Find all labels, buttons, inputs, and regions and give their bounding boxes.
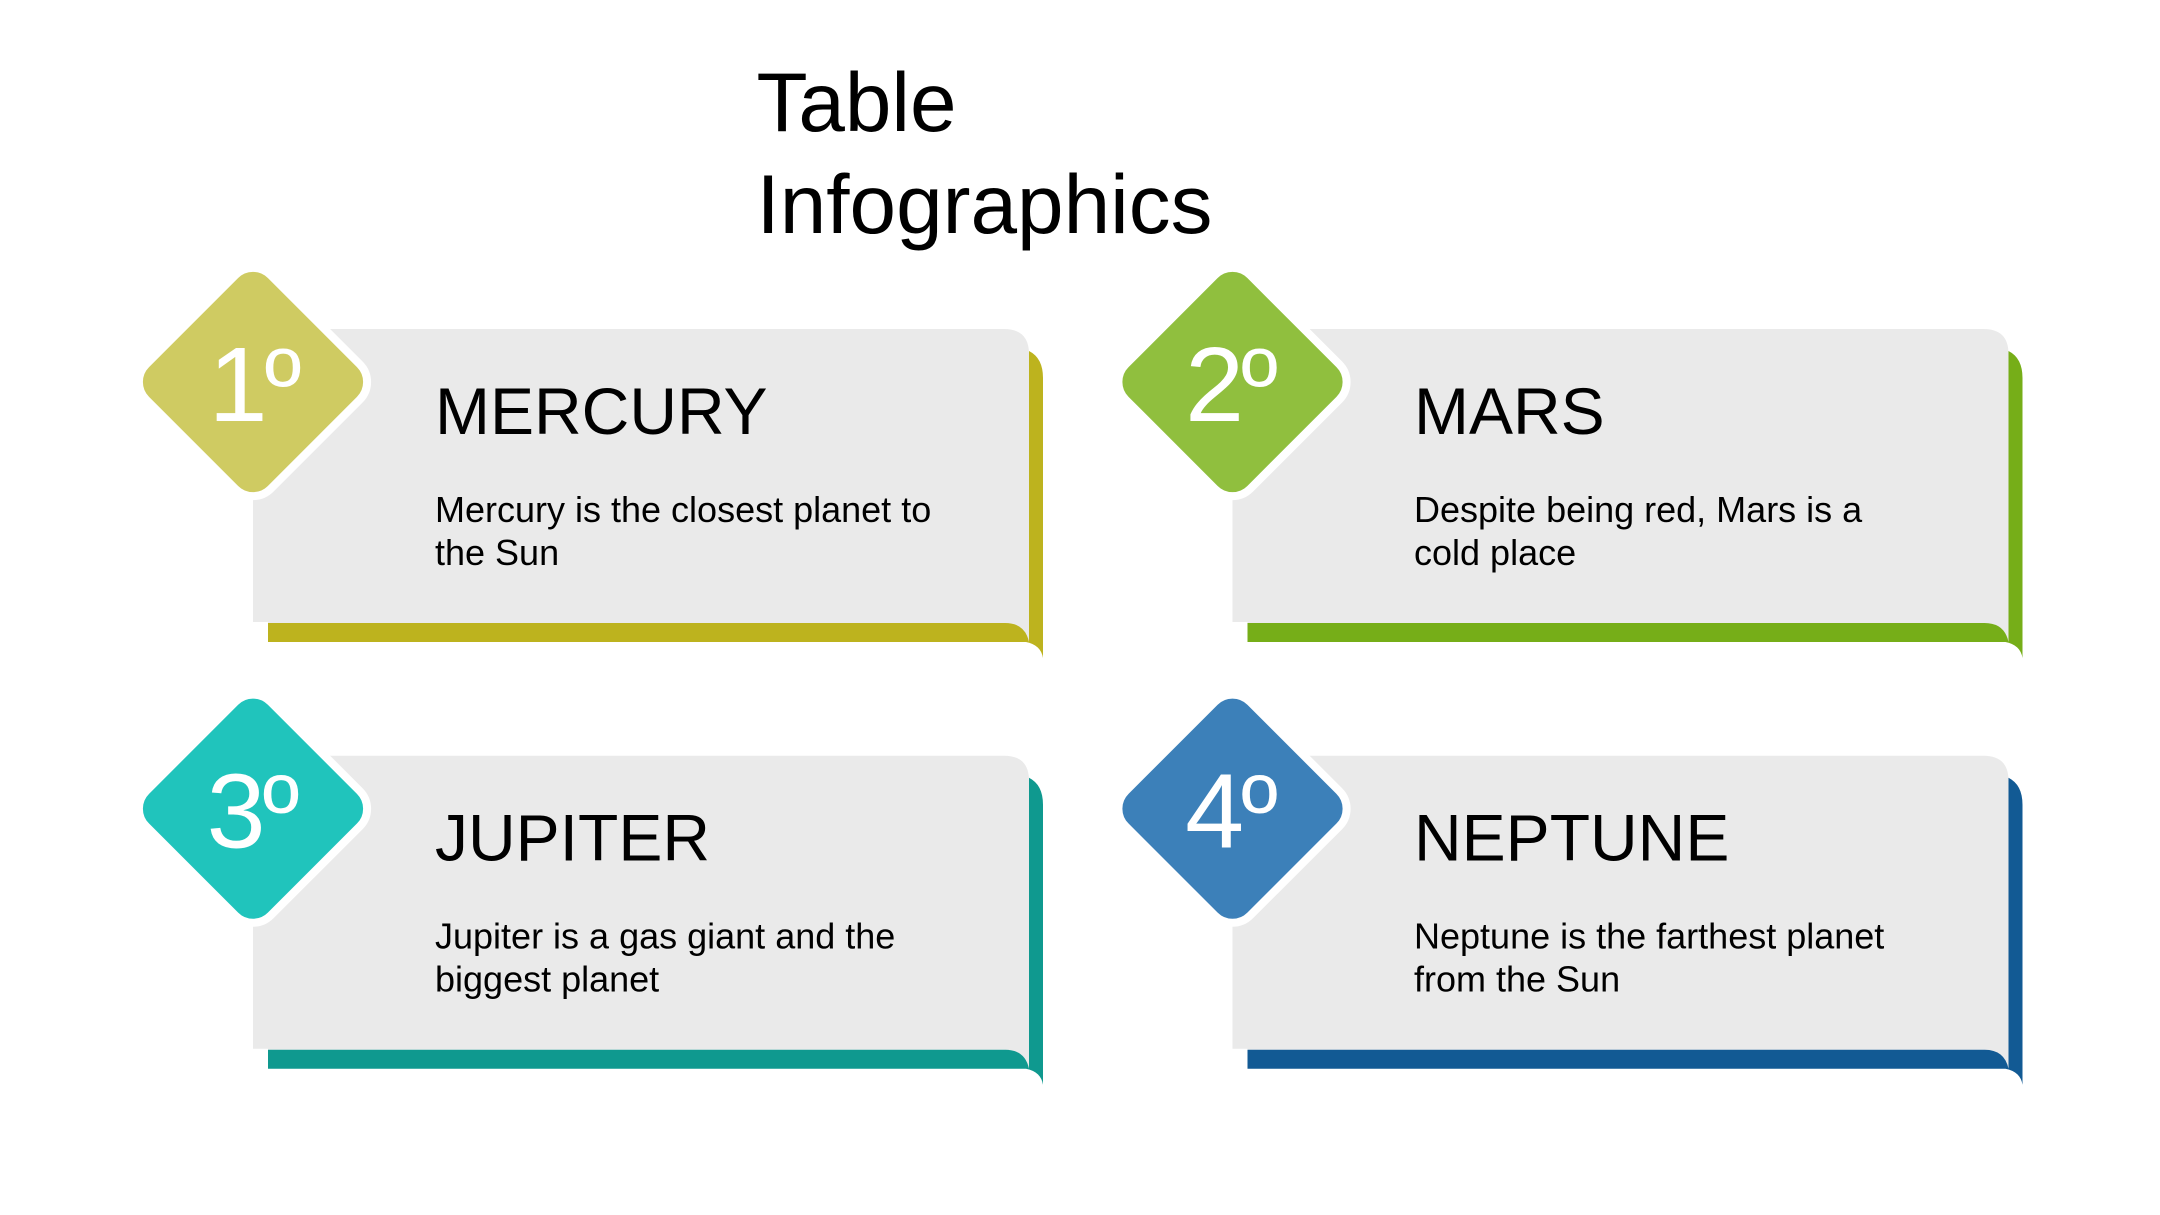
description: jupiter — [435, 916, 895, 1000]
card body: neptune — [1232, 756, 2008, 1069]
badge: 4: 4 — [1185, 753, 1244, 871]
badge: 1 — [129, 258, 377, 506]
card accent: jupiter — [268, 778, 1043, 1085]
description: neptune — [1414, 916, 1884, 1000]
badge: 3 — [129, 684, 377, 933]
badge: 3: º — [263, 756, 299, 868]
card body: jupiter — [253, 756, 1029, 1069]
description: mars — [1414, 489, 1863, 573]
description: mercury — [435, 489, 931, 573]
panel: mercury — [129, 258, 1043, 658]
description: mars: cold place — [1414, 532, 1576, 573]
heading: mercury: MERCURY — [435, 374, 767, 448]
badge: 4: º — [1241, 756, 1278, 868]
badge: 2 — [1108, 258, 1357, 506]
card accent: mars — [1248, 351, 2022, 658]
description: neptune: from the Sun — [1414, 959, 1620, 1000]
badge: 1: 1 — [209, 326, 268, 444]
title — [756, 55, 1212, 251]
description: jupiter: Jupiter is a gas giant and the — [435, 916, 895, 957]
badge: 2: º — [1241, 329, 1278, 441]
description: jupiter: biggest planet — [435, 959, 659, 1000]
heading: mars: MARS — [1414, 374, 1605, 448]
card accent: mercury — [268, 351, 1043, 658]
heading: jupiter: JUPITER — [435, 801, 710, 875]
badge: 2: 2 — [1185, 326, 1244, 444]
badge: 1: º — [265, 329, 301, 441]
card accent: neptune — [1248, 778, 2022, 1085]
description: mars: Despite being red, Mars is a — [1414, 489, 1863, 530]
description: mercury: Mercury is the closest planet to — [435, 489, 931, 530]
heading: neptune: NEPTUNE — [1414, 801, 1729, 875]
badge: 4 — [1108, 684, 1357, 933]
title: Table — [756, 55, 957, 149]
panel: jupiter — [129, 684, 1043, 1085]
description: neptune: Neptune is the farthest planet — [1414, 916, 1884, 957]
card body: mars — [1232, 329, 2008, 642]
badge: 3: 3 — [207, 753, 266, 871]
panel: mars — [1108, 258, 2022, 658]
panel: neptune — [1108, 684, 2022, 1085]
card body: mercury — [253, 329, 1029, 642]
description: mercury: the Sun — [435, 532, 559, 573]
title: Infographics — [756, 157, 1212, 251]
